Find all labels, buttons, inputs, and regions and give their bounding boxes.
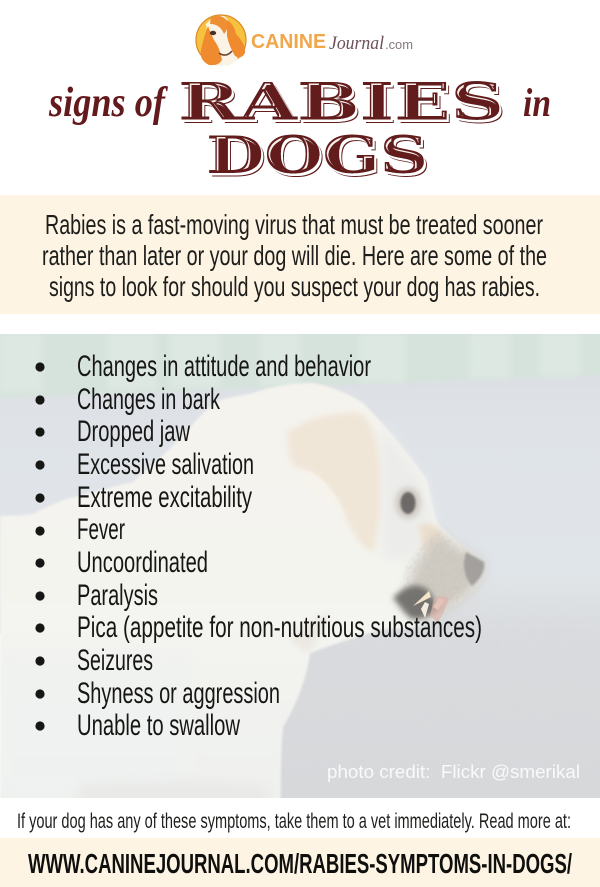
logo wordmark Journal: Journal — [329, 33, 384, 54]
logo wordmark CANINE: CANINE — [251, 31, 326, 53]
list items: Uncoordinated — [77, 546, 208, 579]
panel: photo with symptoms list — [0, 326, 600, 830]
bullets — [35, 362, 45, 731]
photo: dog — [0, 383, 487, 830]
title script: signs of: signs of — [48, 80, 168, 126]
dog eye — [395, 487, 421, 519]
dog muzzle — [402, 533, 485, 620]
dog ear — [287, 413, 380, 552]
list items: Excessive salivation — [77, 448, 254, 481]
photo credit: photo credit: Flickr @smerikal — [327, 762, 580, 782]
dog teeth — [413, 591, 449, 622]
list items: Shyness or aggression — [77, 677, 280, 710]
list items: Seizures — [77, 644, 153, 677]
title: RABIES: RABIES — [178, 72, 504, 132]
list items: Changes in attitude and behavior — [77, 350, 371, 383]
title script: in: in — [523, 80, 551, 125]
list items: Fever — [77, 513, 125, 546]
panel: URL banner — [0, 838, 600, 887]
photo background — [0, 326, 600, 805]
list items: Changes in bark — [77, 383, 221, 416]
logo: Canine Journal — [196, 15, 413, 66]
list items: Dropped jaw — [77, 415, 190, 448]
title — [48, 72, 551, 186]
list items: Extreme excitability — [77, 481, 252, 514]
list items: Paralysis — [77, 579, 158, 612]
icon: basset hound badge — [196, 15, 246, 66]
logo wordmark .com: .com — [385, 37, 413, 52]
title: DOGS: DOGS — [206, 126, 428, 186]
list items: Unable to swallow — [77, 709, 240, 742]
dog face shading — [386, 452, 424, 529]
panel: intro — [0, 195, 600, 314]
symptoms list — [35, 350, 490, 742]
